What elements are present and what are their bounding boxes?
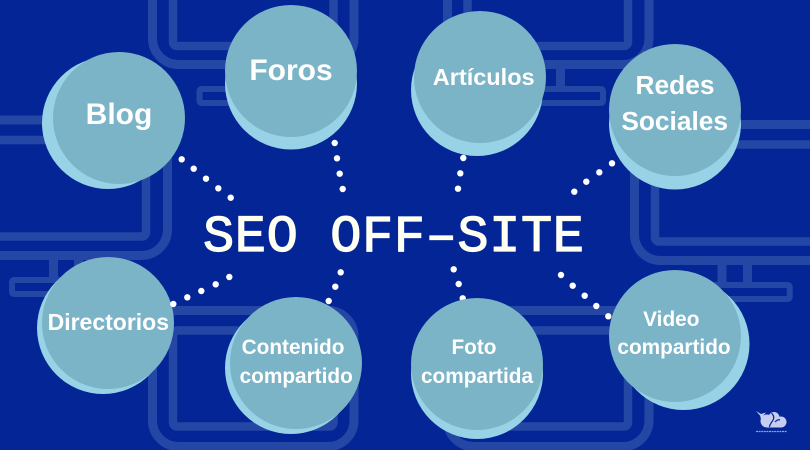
connector: Contenido compartido: [326, 269, 344, 304]
node: Blog: [42, 52, 185, 189]
node: Redes Sociales: Sociales: [621, 106, 728, 136]
node: Contenido compartido: Contenido: [242, 336, 344, 359]
node: Contenido compartido: [225, 297, 362, 434]
dot hidden behind Foto circle: [460, 295, 466, 301]
node: Video compartido: [609, 270, 750, 410]
node: Foto compartida: [411, 298, 543, 439]
node: Redes Sociales: Redes: [636, 70, 714, 100]
node: Redes Sociales: [609, 44, 741, 190]
node: Foto compartida: compartida: [421, 365, 533, 388]
title: SEO OFF–SITE: [203, 208, 584, 267]
monitor: bottom right: [448, 310, 649, 446]
connector: Blog: [178, 156, 234, 201]
node: Contenido compartido: compartido: [240, 365, 353, 388]
connector: Directorios: [170, 274, 232, 307]
node: Video compartido: Video: [643, 308, 699, 331]
node: Foros: [225, 5, 357, 150]
dotted connectors: [170, 140, 615, 319]
monitor: bottom left: [152, 310, 354, 446]
icon: logo cloud with bird: [756, 411, 787, 432]
connector: Foros: [332, 140, 346, 192]
monitor: top left: [152, 0, 354, 103]
connector: Video compartido: [558, 272, 612, 319]
connector: Foto compartida: [450, 266, 462, 287]
node: Directorios: [37, 257, 174, 394]
connector: Redes Sociales: [571, 160, 615, 195]
node: Artículos: Artículos: [433, 64, 535, 90]
node: Artículos: [411, 11, 546, 156]
node: Foto compartida: Foto: [451, 336, 497, 359]
monitor: left: [0, 120, 168, 294]
monitor: top right: [448, 0, 649, 103]
node: Video compartido: compartido: [617, 336, 731, 359]
connector: Artículos: [455, 155, 466, 192]
node: Blog: Blog: [86, 98, 152, 131]
monitor: right: [634, 124, 810, 299]
node: Directorios: Directorios: [48, 309, 169, 335]
node: Foros: Foros: [249, 54, 333, 87]
